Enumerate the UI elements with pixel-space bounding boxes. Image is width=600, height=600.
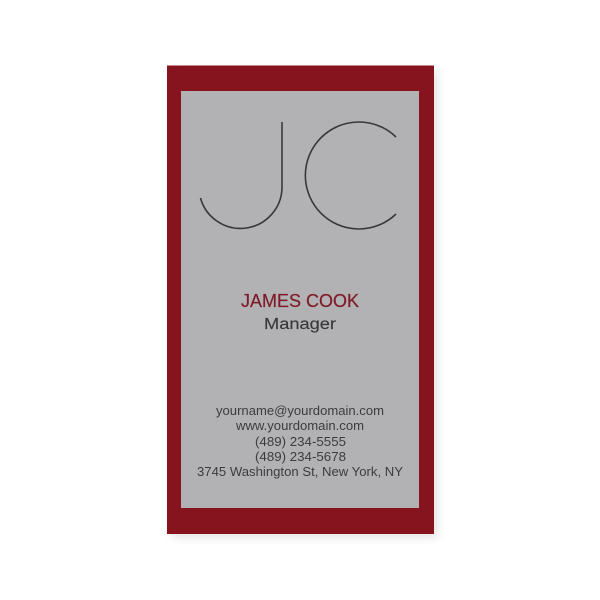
monogram JC [200,122,396,229]
phone 1: (489) 234-5555 [255,434,346,449]
grey panel [181,91,419,508]
monogram letter J [200,122,282,228]
card red border [167,66,434,534]
address: 3745 Washington St, New York, NY [197,464,403,479]
email: yourname@yourdomain.com [216,403,384,418]
job title: Manager [264,316,336,333]
phone 2: (489) 234-5678 [255,449,346,464]
name: JAMES COOK [241,290,360,311]
website: www.yourdomain.com [235,418,364,433]
monogram letter C [305,122,396,229]
contact details [197,403,403,479]
